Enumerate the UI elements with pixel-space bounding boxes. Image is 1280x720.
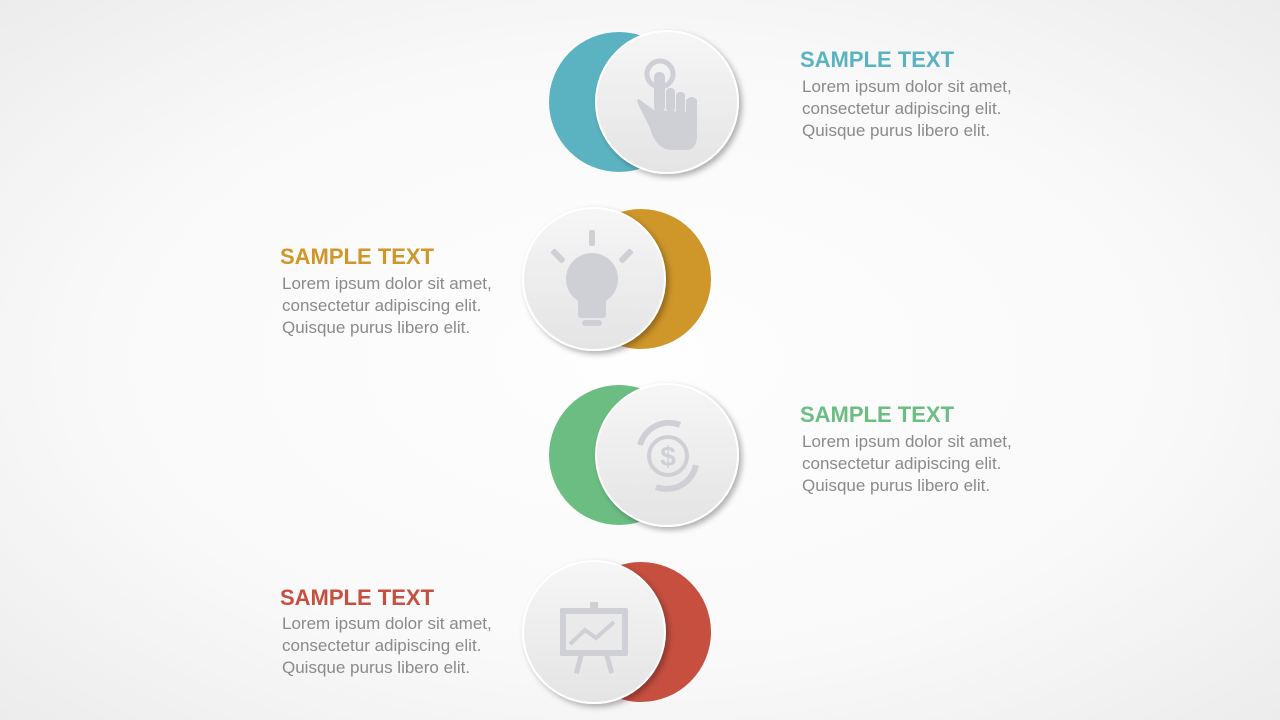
text block 1: Quisque purus libero elit. <box>802 121 990 140</box>
text block 4: SAMPLE TEXT <box>280 585 435 610</box>
text block 2: SAMPLE TEXT <box>280 244 435 269</box>
text block 1: Lorem ipsum dolor sit amet, <box>802 77 1012 96</box>
text block 4: Quisque purus libero elit. <box>282 658 470 677</box>
item 3: money <box>549 384 738 526</box>
text block 4: Lorem ipsum dolor sit amet, <box>282 614 492 633</box>
icon: light bulb <box>550 230 634 326</box>
text block 2: Quisque purus libero elit. <box>282 318 470 337</box>
text block 3 <box>800 402 1012 495</box>
text block 2 <box>280 244 492 337</box>
item 1: touch <box>549 31 738 173</box>
icon: dollar cycle <box>640 423 696 489</box>
text block 2: consectetur adipiscing elit. <box>282 296 481 315</box>
item 4: presentation <box>523 561 711 703</box>
text block 3: consectetur adipiscing elit. <box>802 454 1001 473</box>
text block 3: SAMPLE TEXT <box>800 402 955 427</box>
text block 3: Lorem ipsum dolor sit amet, <box>802 432 1012 451</box>
text block 2: Lorem ipsum dolor sit amet, <box>282 274 492 293</box>
text block 4 <box>280 585 492 677</box>
icon: dollar cycle: $ <box>660 441 676 472</box>
text block 3: Quisque purus libero elit. <box>802 476 990 495</box>
item 2: idea <box>523 208 711 350</box>
icon: chart board <box>560 602 628 674</box>
text block 1: consectetur adipiscing elit. <box>802 99 1001 118</box>
icon: hand pointer <box>637 61 697 150</box>
text block 1 <box>800 47 1012 140</box>
text block 1: SAMPLE TEXT <box>800 47 955 72</box>
text block 4: consectetur adipiscing elit. <box>282 636 481 655</box>
